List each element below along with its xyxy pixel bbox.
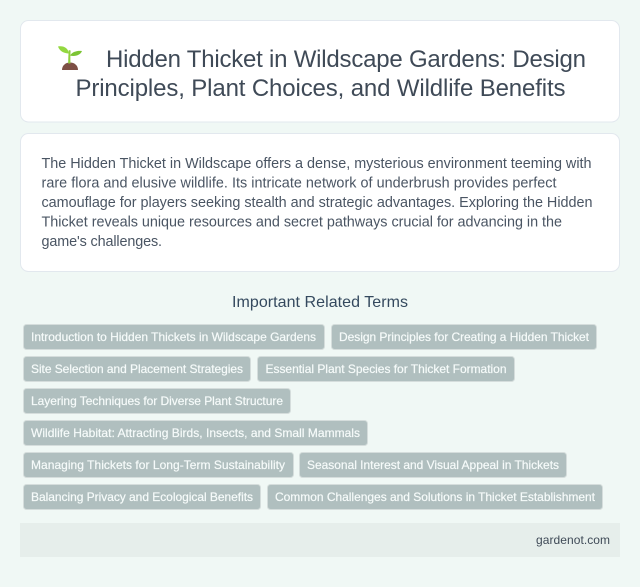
tag	[24, 388, 290, 414]
tag: Layering Techniques for Diverse Plant Structure	[31, 394, 283, 408]
text block: description: Thicket reveals unique resources and secret pathways crucial for advancing in the	[42, 214, 562, 230]
text block: description	[42, 156, 592, 250]
tag: Design Principles for Creating a Hidden Thicket	[339, 330, 590, 344]
tag	[24, 356, 250, 382]
tags: related terms	[24, 324, 602, 510]
tag	[332, 324, 596, 350]
text block: description: The Hidden Thicket in Wildscape offers a dense, mysterious environment teeming with	[42, 156, 592, 172]
text block: description: rare flora and elusive wildlife. Its intricate network of underbrush provides perfect	[42, 176, 556, 192]
tag	[24, 324, 324, 350]
tag: Seasonal Interest and Visual Appeal in Thickets	[307, 458, 559, 472]
panel: title card	[20, 20, 620, 122]
tag	[258, 356, 514, 382]
tag: Site Selection and Placement Strategies	[31, 362, 243, 376]
icon: seedling	[58, 46, 82, 70]
tag	[24, 452, 294, 478]
tag	[268, 484, 602, 510]
tag: Balancing Privacy and Ecological Benefits	[31, 490, 253, 504]
title	[76, 46, 586, 102]
title: Principles, Plant Choices, and Wildlife Benefits	[76, 75, 566, 102]
tag: Introduction to Hidden Thickets in Wildscape Gardens	[31, 330, 316, 344]
footer: site name: gardenot.com	[536, 533, 610, 547]
text block: description: camouflage for players seeking stealth and strategic advantages. Exploring the Hidden	[42, 195, 592, 211]
tag: Managing Thickets for Long-Term Sustainability	[31, 458, 285, 472]
tag: Essential Plant Species for Thicket Formation	[266, 362, 506, 376]
tag	[24, 420, 368, 446]
heading: related terms: Important Related Terms	[232, 294, 408, 311]
footer	[20, 523, 620, 557]
tag	[300, 452, 566, 478]
tag	[24, 484, 260, 510]
title: Hidden Thicket in Wildscape Gardens: Design	[106, 46, 586, 73]
tag: Wildlife Habitat: Attracting Birds, Insects, and Small Mammals	[31, 426, 360, 440]
text block: description: game's challenges.	[42, 234, 162, 250]
panel: description	[20, 134, 620, 272]
tag: Common Challenges and Solutions in Thicket Establishment	[275, 490, 596, 504]
